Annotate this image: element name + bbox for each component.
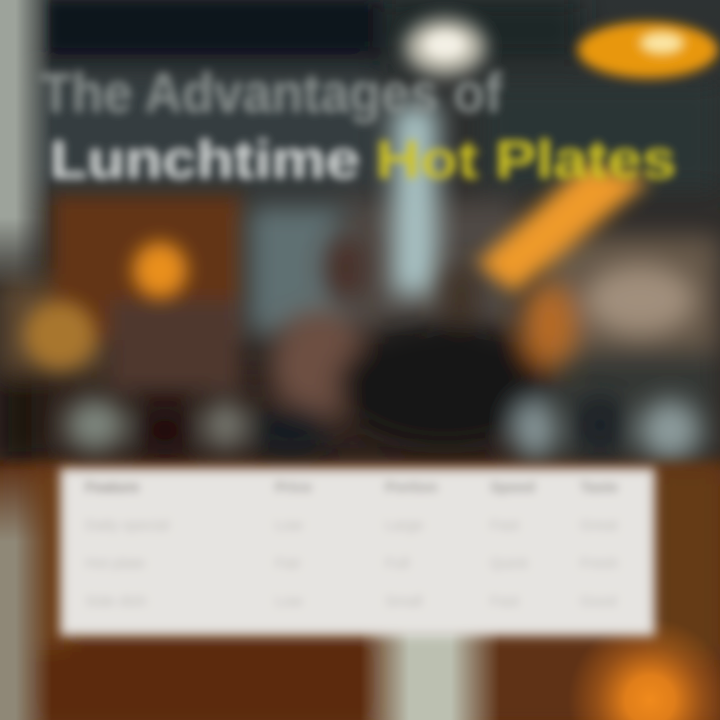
table text: Full xyxy=(385,555,409,572)
table top xyxy=(0,466,720,720)
table text: Low xyxy=(275,517,303,534)
light column xyxy=(392,105,438,295)
title line 1: The Advantages of xyxy=(40,61,502,124)
table text: Large xyxy=(385,517,423,534)
table text: Taste xyxy=(580,479,618,496)
pendant lamp: white xyxy=(405,19,485,75)
bottom light column xyxy=(362,628,498,720)
table text: Speed xyxy=(490,479,535,496)
table text: Daily special xyxy=(85,517,169,534)
table text: Fast xyxy=(490,517,520,534)
people at the table xyxy=(65,236,700,460)
bottom orange glow xyxy=(568,618,720,720)
table text: Small xyxy=(385,593,423,610)
back wall panel: teal xyxy=(248,205,343,335)
table text: Hot plate xyxy=(85,555,145,572)
back wall panel: brown xyxy=(52,195,242,390)
left wall strip: lower xyxy=(0,465,52,720)
table text: Quick xyxy=(490,555,529,572)
table text: Fresh xyxy=(580,555,618,572)
table text: Portion xyxy=(385,479,438,496)
side glow light xyxy=(24,301,96,369)
table text: Price xyxy=(275,479,312,496)
table text: Side dish xyxy=(85,593,147,610)
table text: Fair xyxy=(275,555,301,572)
table text: Good xyxy=(580,593,617,610)
title line 2: Lunchtime xyxy=(50,130,360,190)
diagonal orange light streak xyxy=(475,165,650,292)
title highlight: Hot Plates xyxy=(376,130,676,190)
table panel xyxy=(60,468,655,636)
background scene xyxy=(0,0,720,460)
wall glow light xyxy=(133,242,187,298)
comparison table xyxy=(60,468,655,636)
pendant lamp: orange xyxy=(578,22,718,78)
table text: Fast xyxy=(490,593,520,610)
title xyxy=(40,61,676,190)
table text: Low xyxy=(275,593,303,610)
table text: Feature xyxy=(85,479,139,496)
left wall strip: upper xyxy=(0,0,52,290)
table text: Great xyxy=(580,517,618,534)
table text xyxy=(85,479,618,610)
